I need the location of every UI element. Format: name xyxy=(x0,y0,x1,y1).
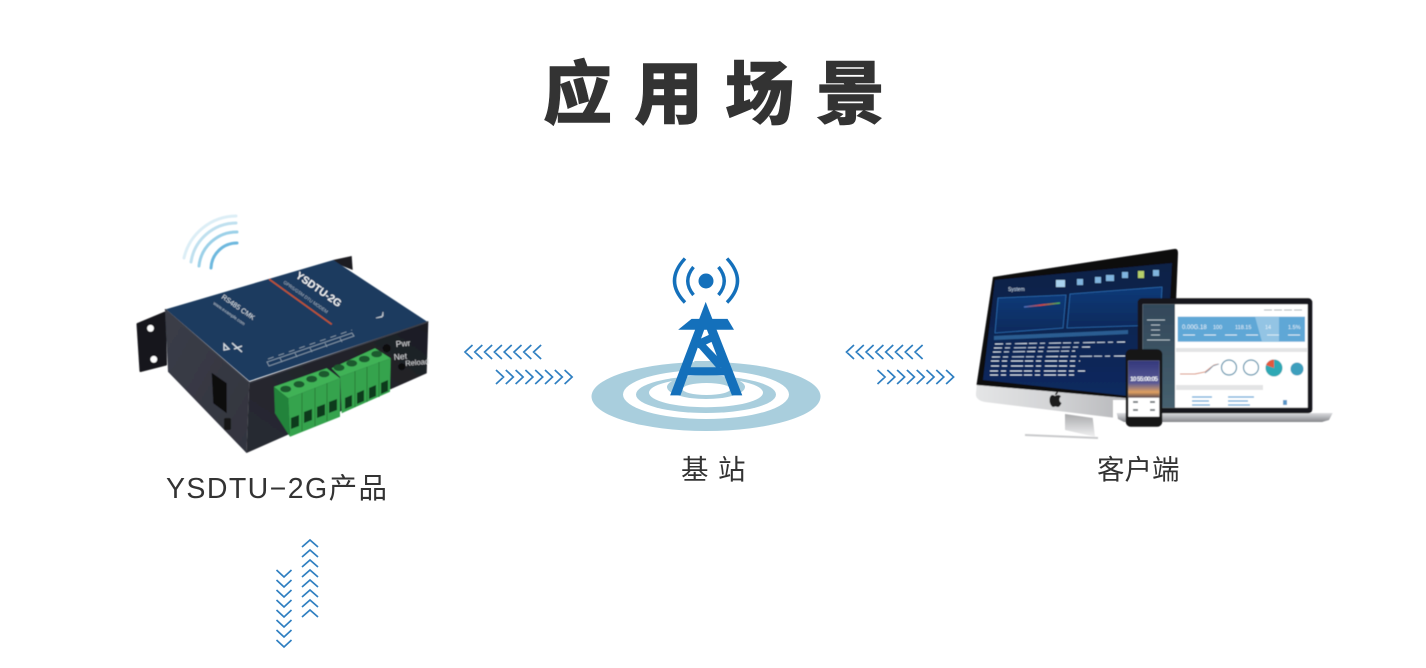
screen logo: System xyxy=(1008,287,1025,293)
case front face xyxy=(246,322,428,453)
title: 场 xyxy=(725,38,794,138)
device model label: YSDTU-2G xyxy=(293,270,344,310)
chart section headers xyxy=(1176,348,1307,390)
rear mounting flange xyxy=(333,256,353,270)
phone clock text: 10 55:00:05 xyxy=(1130,376,1158,383)
left mounting flange xyxy=(138,312,166,371)
signal waves xyxy=(674,258,738,302)
screen rainbow bar xyxy=(1024,303,1060,307)
label: product: YSDTU−2G产品 xyxy=(166,473,387,505)
label: base station: 基 xyxy=(681,454,708,485)
device subtitle: GPRS/GSM DTU MODEM xyxy=(282,280,329,315)
laptop lid xyxy=(1138,298,1312,413)
LED labels xyxy=(393,338,429,368)
screen table rows xyxy=(990,342,1125,375)
dashboard banner: 0.00G.18 xyxy=(1182,325,1207,331)
label: base station xyxy=(681,454,746,485)
case top panel xyxy=(166,260,427,381)
top logo mark xyxy=(376,312,383,318)
monitor bezel xyxy=(976,249,1178,402)
screen panel right xyxy=(1067,287,1162,328)
smartphone xyxy=(1126,349,1162,427)
apple logo xyxy=(1050,392,1062,407)
tower reflection xyxy=(694,361,716,380)
desktop monitor xyxy=(976,249,1178,438)
label: base station: 站 xyxy=(718,454,746,485)
monitor stand xyxy=(1065,414,1095,437)
laptop sidebar xyxy=(1143,304,1175,408)
top nav text xyxy=(1264,309,1304,311)
small tile xyxy=(1283,400,1287,405)
device brand text: RS485 CMK xyxy=(220,294,256,322)
laptop xyxy=(1117,298,1333,422)
power symbol xyxy=(224,343,242,352)
line chart xyxy=(1180,364,1218,374)
dashboard banner: 118.15 xyxy=(1235,325,1251,331)
sidebar menu lines xyxy=(1147,320,1170,340)
LED labels: Pwr xyxy=(395,338,411,349)
monitor chin xyxy=(976,383,1135,419)
arrows: base station to client xyxy=(846,345,954,384)
dashboard banner: 1.5% xyxy=(1288,325,1301,331)
dashboard banner: 14 xyxy=(1265,325,1271,331)
orange stripe xyxy=(269,279,332,324)
screen table header xyxy=(994,330,1128,340)
phone wallpaper xyxy=(1128,361,1159,398)
stand shadow xyxy=(1025,435,1098,438)
device brand subtext: www.example.com xyxy=(212,301,246,326)
title: 景 xyxy=(816,38,885,138)
title xyxy=(543,38,885,138)
icon: base station tower xyxy=(592,258,820,431)
screen panel left xyxy=(995,295,1066,333)
phone stat tiles xyxy=(1133,401,1155,411)
case left face xyxy=(165,309,249,453)
label: client: 客户端 xyxy=(1097,454,1180,485)
reset button xyxy=(224,418,231,430)
dashboard banner: 100 xyxy=(1213,325,1222,331)
LED labels: Net xyxy=(393,351,408,362)
tower frame xyxy=(671,303,742,395)
terminal block: right xyxy=(332,348,391,413)
terminal block: left xyxy=(274,368,340,437)
phone screen xyxy=(1128,361,1159,417)
dashboard banner xyxy=(1178,317,1305,342)
laptop base xyxy=(1117,413,1333,422)
globe graphic xyxy=(1290,362,1304,376)
antenna dot xyxy=(698,274,714,288)
phone halo xyxy=(1113,400,1127,418)
terminal silk-screen legend xyxy=(267,330,354,366)
product: YSDTU-2G device xyxy=(138,256,429,453)
arrows: device to base station xyxy=(465,345,572,384)
monitor screen xyxy=(983,263,1172,400)
phone body xyxy=(1126,349,1162,427)
indicator LEDs xyxy=(383,344,405,370)
arrows: device vertical link xyxy=(276,540,318,647)
title: 应 xyxy=(543,38,612,138)
title: 用 xyxy=(634,38,703,138)
ground signal rings xyxy=(592,362,820,431)
client devices xyxy=(976,249,1333,438)
pie chart xyxy=(1266,359,1282,376)
RJ45 port xyxy=(212,373,227,413)
gauges xyxy=(1222,360,1258,375)
bar lists xyxy=(1192,397,1254,405)
LED labels: Reload xyxy=(405,357,429,368)
laptop screen xyxy=(1143,304,1308,408)
screen menu icons xyxy=(1056,270,1159,287)
icon: wifi signal xyxy=(184,216,237,268)
